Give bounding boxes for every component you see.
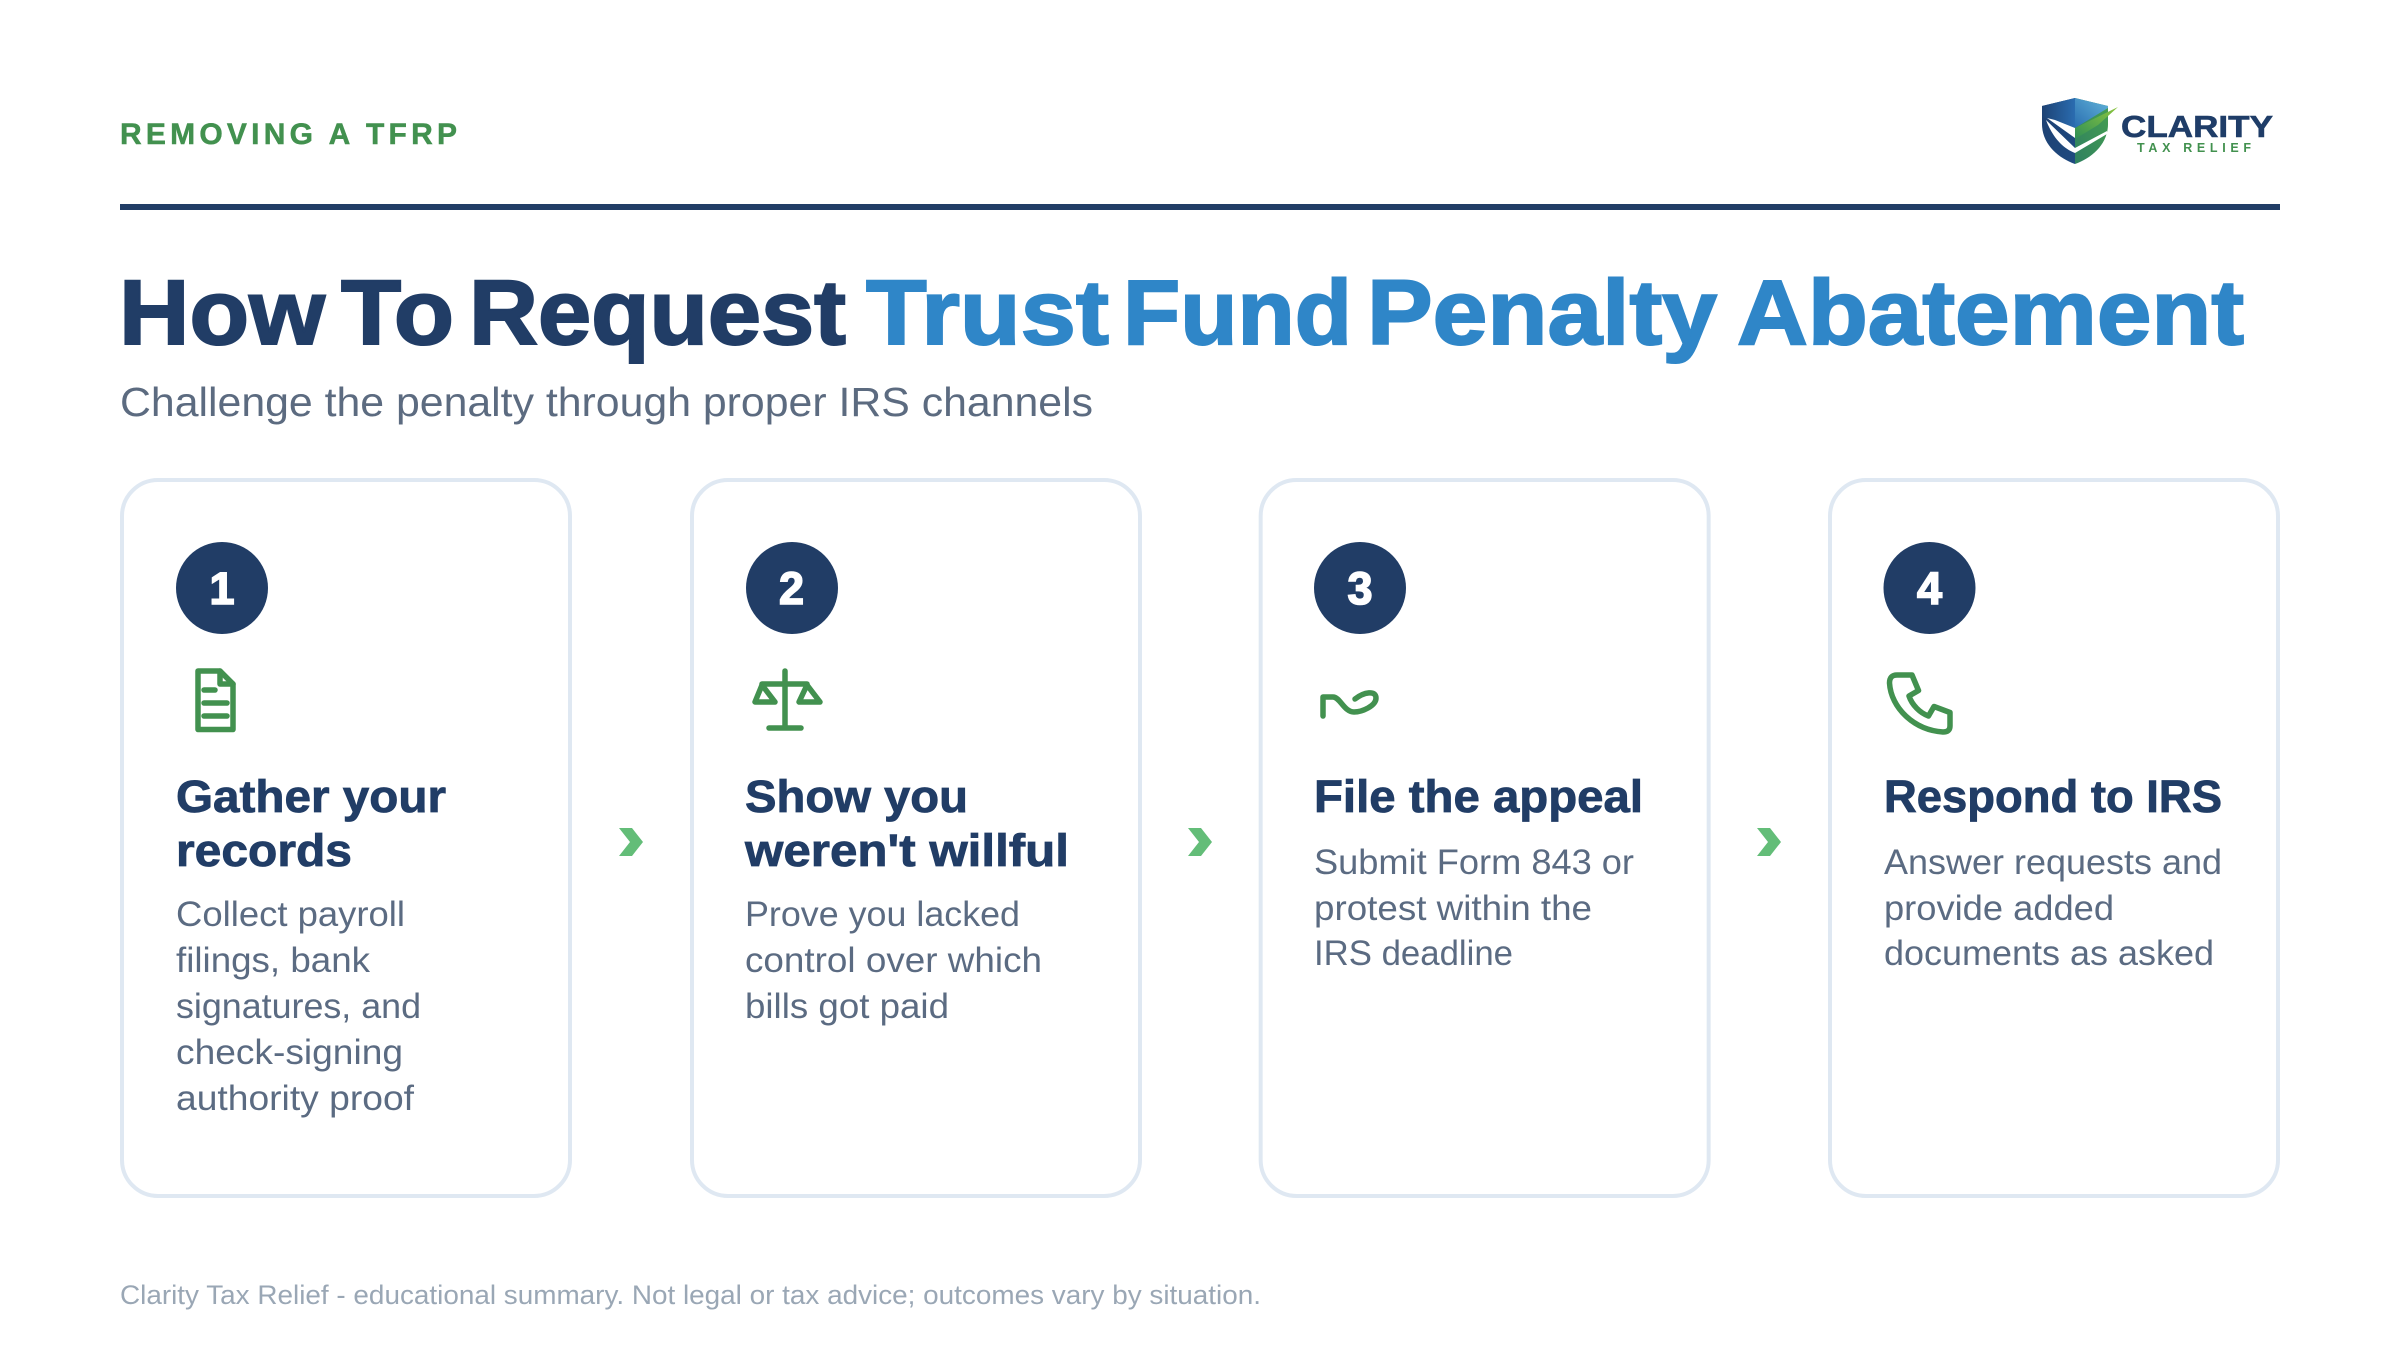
heading: Show you <box>745 771 968 822</box>
card frame <box>1261 480 1709 1196</box>
description <box>1884 843 2222 973</box>
description: provide added <box>1884 889 2114 928</box>
panel: step 2 <box>692 480 1140 1196</box>
title dark part: Request <box>469 262 846 364</box>
heading: File the appeal <box>1314 771 1643 822</box>
icon: document <box>198 671 233 730</box>
heading: records <box>176 825 352 876</box>
heading: weren't willful <box>744 825 1069 876</box>
icon: signature squiggle <box>1323 693 1376 716</box>
description: Collect payroll <box>176 895 405 934</box>
heading: Respond to IRS <box>1884 771 2222 822</box>
title dark part: How <box>119 262 325 364</box>
logo shield <box>2042 98 2118 164</box>
panel: step 1 <box>122 480 570 1196</box>
step number 3: 3 <box>1347 563 1373 614</box>
step number 1: 1 <box>209 563 235 614</box>
description: documents as asked <box>1884 934 2214 973</box>
description <box>1314 843 1634 973</box>
logo: Clarity Tax Relief <box>2042 98 2273 164</box>
heading <box>176 771 446 876</box>
description: bills got paid <box>745 987 949 1026</box>
icon: phone <box>1890 675 1950 732</box>
step number 4 <box>1884 542 1976 634</box>
panel: step 3 <box>1261 480 1709 1196</box>
description: Answer requests and <box>1884 843 2222 882</box>
title <box>119 262 2244 364</box>
description <box>176 895 421 1118</box>
footer disclaimer: Clarity Tax Relief - educational summary. Not legal or tax advice; outcomes vary by situation. <box>120 1280 1261 1310</box>
arrow 3 <box>1757 828 1781 856</box>
header rule <box>120 204 2280 210</box>
step number 1 <box>176 542 268 634</box>
title accent part <box>866 262 2244 364</box>
eyebrow label: REMOVING A TFRP <box>120 118 457 151</box>
title accent part: Penalty <box>1367 262 1717 364</box>
card frame <box>1830 480 2278 1196</box>
description: protest within the <box>1314 889 1592 928</box>
description: IRS deadline <box>1314 934 1513 973</box>
icon: scales <box>755 671 820 728</box>
step number 2 <box>746 542 838 634</box>
title dark part <box>119 262 846 364</box>
heading <box>744 771 1069 876</box>
description: control over which <box>745 941 1042 980</box>
description: filings, bank <box>176 941 371 980</box>
panel: step 4 <box>1830 480 2278 1196</box>
arrow 2 <box>1188 828 1212 856</box>
title accent part: Trust <box>866 262 1109 364</box>
step number 2: 2 <box>779 563 804 614</box>
heading: Gather your <box>176 771 446 822</box>
logo tagline: TAX RELIEF <box>2137 141 2251 155</box>
step number 4: 4 <box>1917 563 1942 614</box>
description: Submit Form 843 or <box>1314 843 1634 882</box>
arrow 1 <box>619 828 643 856</box>
title accent part: Abatement <box>1737 262 2244 364</box>
description: Prove you lacked <box>745 895 1020 934</box>
logo wordmark: CLARITY <box>2121 109 2273 144</box>
description <box>745 895 1042 1026</box>
title accent part: Fund <box>1123 262 1352 364</box>
description: authority proof <box>176 1079 414 1118</box>
subtitle: Challenge the penalty through proper IRS channels <box>120 379 1093 425</box>
card frame <box>122 480 570 1196</box>
description: check-signing <box>176 1033 403 1072</box>
title dark part: To <box>341 262 454 364</box>
description: signatures, and <box>176 987 421 1026</box>
step number 3 <box>1314 542 1406 634</box>
card frame <box>692 480 1140 1196</box>
